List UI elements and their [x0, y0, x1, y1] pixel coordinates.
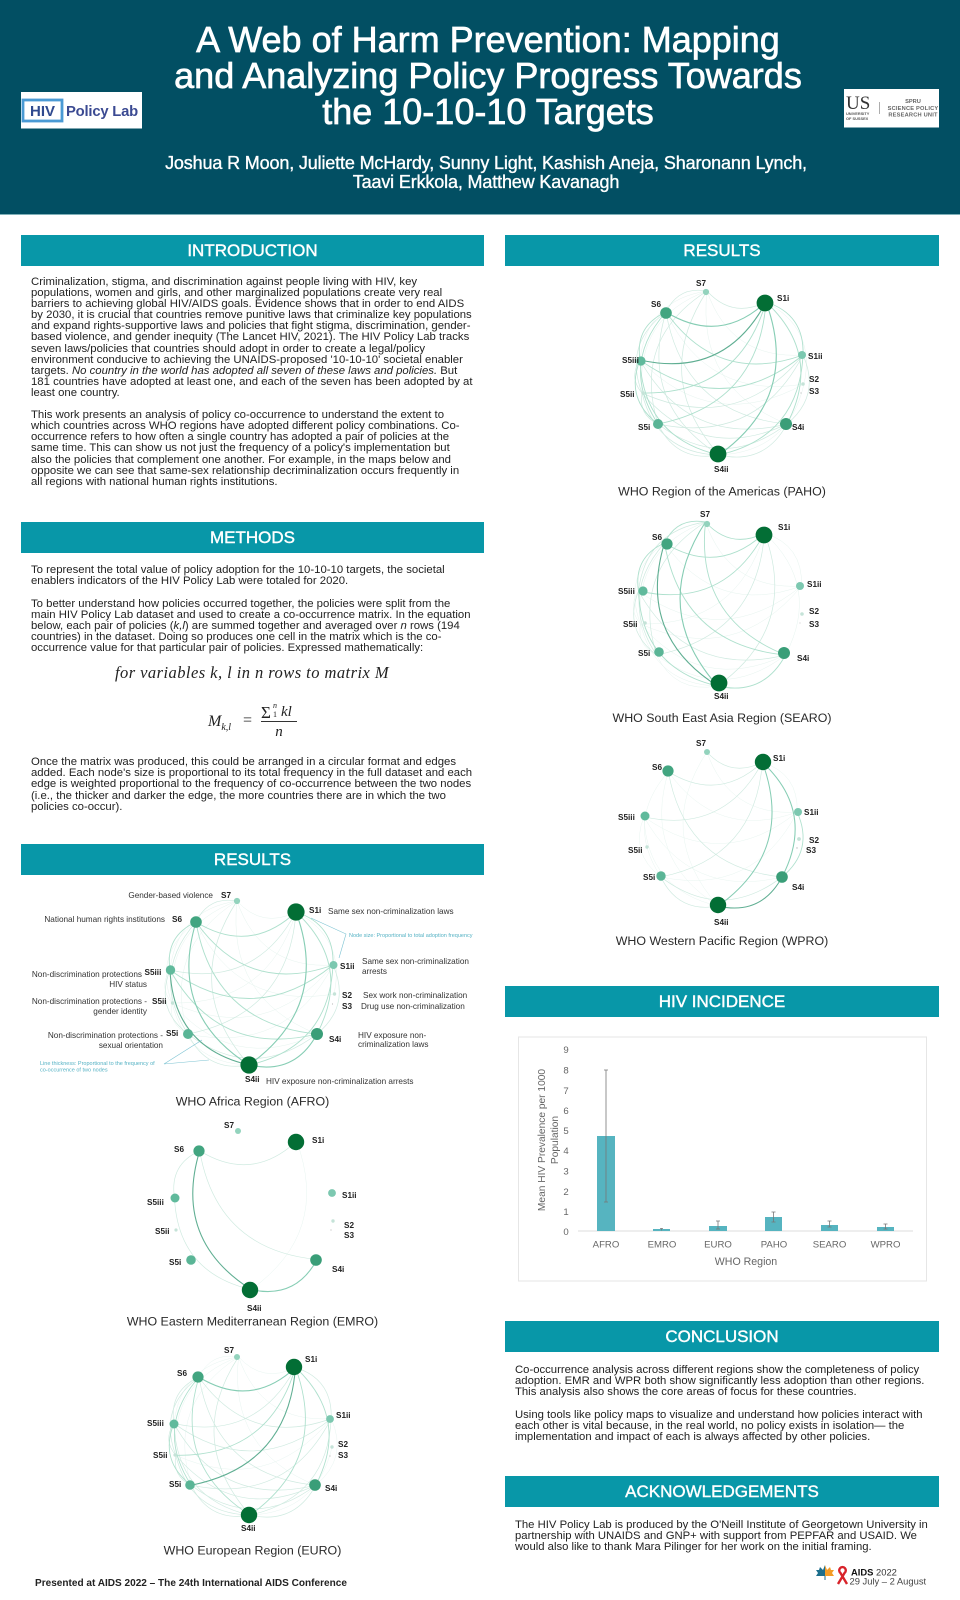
node codes: SEARO: S1i [778, 523, 790, 532]
policy descriptions: AFRO [32, 891, 469, 1086]
heading: results right: RESULTS [683, 241, 761, 260]
text block: methods intro: enablers indicators of the HIV Policy Lab were totaled for 2020. [31, 575, 348, 587]
node codes: AFRO: S5iii [144, 968, 161, 977]
y axis labels: 5 [563, 1126, 569, 1137]
node codes: WPRO: S4ii [714, 918, 729, 927]
equation: M formula: n [273, 701, 277, 710]
caption: EMRO: WHO Eastern Mediterranean Region (EMRO) [127, 1314, 378, 1328]
node codes: EURO: S4ii [241, 1524, 256, 1533]
equation: M formula: Mk,l [208, 713, 231, 733]
node codes: EMRO: S4i [332, 1265, 344, 1274]
node codes: EMRO: S6 [174, 1145, 184, 1154]
caption: EURO: WHO European Region (EURO) [164, 1544, 341, 1558]
node codes: PAHO: S4i [792, 423, 804, 432]
node codes: WPRO: S5i [643, 873, 655, 882]
edges: EURO [169, 1356, 337, 1517]
y axis labels: 6 [563, 1106, 569, 1117]
text block: methods intro: To represent the total value of policy adoption for the 10-10-10 targets, the societal [31, 564, 445, 576]
heading: methods: METHODS [210, 528, 295, 547]
equation: matrix sentence: for variables k, l in n rows to matrix M [115, 663, 389, 682]
text block: introduction: based violence, and gender inequity (The Lancet HIV, 2021). The HIV Policy Lab tracks [31, 331, 469, 343]
text block: conclusion [515, 1364, 924, 1443]
caption: PAHO: WHO Region of the Americas (PAHO) [618, 484, 826, 498]
caption: AFRO: WHO Africa Region (AFRO) [176, 1094, 329, 1108]
text block: methods intro: To better understand how policies occurred together, the policies were split from the [31, 598, 450, 610]
node codes: EURO: S5iii [147, 1419, 164, 1428]
text block: introduction: barriers to achieving global HIV/AIDS goals. Evidence shows that in order to end AIDS [31, 298, 464, 310]
node codes: PAHO: S2 [809, 375, 819, 384]
chart: EURO network [147, 1346, 351, 1558]
policy descriptions: AFRO: Drug use non-criminalization [361, 1002, 465, 1011]
node codes: SEARO: S5i [638, 649, 650, 658]
heading: introduction: INTRODUCTION [187, 241, 318, 260]
header banner [0, 0, 960, 215]
text block: introduction [31, 276, 472, 488]
node codes: EMRO: S5i [169, 1258, 181, 1267]
node codes: EMRO: S5ii [155, 1227, 170, 1236]
text block: acknowledgements: would also like to thank Mara Pilinger for her work on the initial framing. [515, 1541, 872, 1553]
title: A Web of Harm Prevention: Mapping [196, 19, 780, 60]
text block: methods description: edge is weighted proportional to the frequency of co-occurrence between the two nodes [31, 778, 471, 790]
text block: introduction: seven laws/policies that countries should adopt in order to create a legal/policy [31, 343, 425, 355]
node codes: PAHO: S5ii [620, 390, 635, 399]
node codes: PAHO: S6 [651, 300, 661, 309]
logo: HIV Policy Lab: HIV [30, 103, 55, 120]
policy descriptions: AFRO: Sex work non-criminalization [363, 991, 468, 1000]
category labels [593, 1240, 900, 1250]
node codes: WPRO: S5ii [628, 846, 643, 855]
chart: PAHO network [618, 279, 826, 498]
y axis labels: 0 [563, 1227, 569, 1238]
node codes: WPRO: S2 [809, 836, 819, 845]
equation: M formula: 1 [273, 710, 277, 719]
policy descriptions: AFRO: Same sex non-criminalization laws [328, 907, 454, 916]
text block: introduction: and expand rights-supportive laws and policies that fight stigma, discrimination, gender- [31, 320, 470, 332]
equation: M formula [208, 701, 297, 740]
text block: introduction: Criminalization, stigma, and discrimination against people living with HIV, key [31, 276, 417, 288]
node codes: PAHO [620, 279, 823, 474]
annotation: line thickness: Line thickness: Proportional to the frequency of [40, 1061, 155, 1067]
chart: AFRO network [32, 891, 473, 1108]
y axis labels: 4 [563, 1146, 569, 1157]
node codes: SEARO: S5ii [623, 620, 638, 629]
caption: SEARO: WHO South East Asia Region (SEARO) [613, 711, 831, 725]
title [174, 19, 802, 132]
title: and Analyzing Policy Progress Towards [174, 55, 802, 96]
policy descriptions: AFRO: sexual orientation [99, 1041, 163, 1050]
authors [165, 153, 807, 192]
text block: methods intro: occurrence value for that particular pair of policies. Expressed mathematically: [31, 642, 423, 654]
text block: introduction: which countries across WHO regions have adopted different policy combinations. Co- [31, 420, 460, 432]
node codes: EMRO: S4ii [247, 1304, 262, 1313]
text block: conclusion: This analysis also shows the core areas of focus for these countries. [515, 1386, 857, 1398]
node codes: EMRO: S1ii [342, 1191, 357, 1200]
nodes: EURO [170, 1354, 334, 1523]
authors: Joshua R Moon, Juliette McHardy, Sunny Light, Kashish Aneja, Sharonann Lynch, [165, 153, 807, 173]
text block: introduction: by 2030, it is crucial that countries remove punitive laws that criminalize key populations [31, 309, 472, 321]
logo: HIV Policy Lab [21, 92, 142, 128]
text block: methods intro: main HIV Policy Lab dataset and used to create a co-occurrence matrix. In the equation [31, 609, 470, 621]
y axis labels: 9 [563, 1045, 569, 1056]
heading: acknowledgements: ACKNOWLEDGEMENTS [625, 1482, 819, 1501]
node codes: WPRO: S1i [773, 754, 785, 763]
text block: methods intro: countries) in the dataset. Doing so produces one cell in the matrix which is the co- [31, 631, 441, 643]
y axis labels [563, 1045, 569, 1238]
text block: methods description: policies co-occur). [31, 801, 122, 813]
text block: conclusion: each other is vital because, in the real world, no policy exists in isolation— the [515, 1420, 904, 1432]
nodes: SEARO [638, 521, 804, 691]
node codes: AFRO: S1i [309, 906, 321, 915]
text block: conclusion: adoption. EMR and WPR both show significantly less adoption than other regions. [515, 1375, 924, 1387]
category labels: EURO [704, 1240, 732, 1250]
y axis labels: 3 [563, 1166, 569, 1178]
node codes: EURO: S1ii [336, 1411, 351, 1420]
title: the 10-10-10 Targets [322, 91, 654, 132]
node codes: PAHO: S4ii [714, 465, 729, 474]
node codes: AFRO: S7 [221, 891, 231, 900]
text block: introduction: also the policies that complement one another. For example, in the maps below and [31, 454, 451, 466]
node codes: PAHO: S1i [777, 294, 789, 303]
node codes: WPRO: S5iii [618, 813, 635, 822]
logo: University of Sussex SPRU: RESEARCH UNIT [888, 112, 938, 118]
node codes: WPRO: S7 [696, 739, 706, 748]
node codes: EURO: S6 [177, 1369, 187, 1378]
annotation: node size [311, 918, 473, 958]
policy descriptions: AFRO: arrests [362, 967, 387, 976]
policy descriptions: AFRO: National human rights institutions [44, 915, 165, 924]
text block: methods description: (i.e., the thicker and darker the edge, the more countries there are in which the two [31, 790, 446, 802]
node codes: WPRO: S1ii [804, 808, 819, 817]
logo: University of Sussex SPRU: SCIENCE POLICY [888, 106, 938, 112]
heading: conclusion [505, 1321, 939, 1352]
event dates: 29 July – 2 August [850, 1576, 927, 1586]
node codes: AFRO: S5ii [152, 997, 167, 1006]
node codes: WPRO: S3 [806, 846, 816, 855]
text block: acknowledgements [515, 1519, 928, 1553]
text block: introduction: targets. No country in the world has adopted all seven of these laws and policies. But [31, 365, 457, 377]
policy descriptions: AFRO: Non-discrimination protections - [48, 1031, 163, 1040]
text block: introduction: populations, women and girls, and other marginalized populations create very real [31, 287, 442, 299]
heading: HIV incidence [505, 986, 939, 1017]
node codes: AFRO: S2 [342, 991, 352, 1000]
node codes: PAHO: S5iii [622, 356, 639, 365]
bars [597, 1136, 894, 1231]
heading: results left [21, 844, 484, 875]
heading: HIV incidence: HIV INCIDENCE [659, 992, 785, 1011]
footer note: Presented at AIDS 2022 – The 24th International AIDS Conference [35, 1578, 347, 1589]
node codes: WPRO: S6 [652, 763, 662, 772]
node codes: WPRO [618, 739, 819, 927]
icon: red ribbon [838, 1567, 847, 1584]
node codes: AFRO: S4ii [245, 1075, 260, 1084]
node codes: SEARO: S1ii [807, 580, 822, 589]
node codes: EURO: S4i [325, 1484, 337, 1493]
node codes: EMRO: S3 [344, 1231, 354, 1240]
y axis title line 2: Population [550, 1116, 561, 1164]
category labels: PAHO [761, 1240, 787, 1250]
logo: University of Sussex SPRU: SPRU [905, 99, 921, 105]
heading: acknowledgements [505, 1476, 939, 1507]
node codes: SEARO: S4i [797, 654, 809, 663]
y axis labels: 1 [563, 1207, 569, 1218]
logo: University of Sussex SPRU [844, 89, 939, 128]
text block: methods intro: below, each pair of policies (k,l) are summed together and averaged over n rows (194 [31, 620, 460, 632]
node codes: PAHO: S7 [696, 279, 706, 288]
text block: introduction: environment conducive to achieving the UNAIDS-proposed '10-10-10' societal enabler [31, 354, 463, 366]
annotation: line thickness: co-occurrence of two nodes [40, 1068, 108, 1074]
text block: methods description: Once the matrix was produced, this could be arranged in a circular format and edges [31, 756, 456, 768]
heading: introduction [21, 235, 484, 266]
node codes: EURO: S3 [338, 1451, 348, 1460]
policy descriptions: AFRO: HIV exposure non-criminalization arrests [266, 1077, 413, 1086]
node codes: EURO: S5i [169, 1480, 181, 1489]
node codes: WPRO: S4i [792, 883, 804, 892]
text block: acknowledgements: The HIV Policy Lab is produced by the O'Neill Institute of Georgetown University in [515, 1519, 928, 1531]
edges: EMRO [174, 1141, 317, 1292]
policy descriptions: AFRO: Gender-based violence [128, 891, 213, 900]
node codes: EMRO: S5iii [147, 1198, 164, 1207]
heading: results right [505, 235, 939, 266]
heading: results left: RESULTS [214, 850, 291, 869]
node codes: AFRO [144, 891, 355, 1084]
edges: WPRO [639, 752, 803, 908]
node codes: SEARO: S6 [652, 533, 662, 542]
edges: PAHO [635, 290, 809, 457]
text block: methods description: added. Each node's size is proportional to its total frequency in the full dataset and each [31, 767, 472, 779]
category labels: AFRO [593, 1240, 619, 1250]
text block: introduction: opposite we can see that same-sex relationship decriminalization occurs frequently in [31, 465, 459, 477]
x axis line [578, 1230, 913, 1232]
node codes: AFRO: S1ii [340, 962, 355, 971]
text block: introduction: same time. This can show us not just the frequency of a policy's implementation but [31, 442, 450, 454]
node codes: PAHO: S3 [809, 387, 819, 396]
category labels: WPRO [871, 1240, 900, 1250]
category labels: EMRO [648, 1240, 676, 1250]
edges: SEARO [633, 521, 802, 688]
logo: HIV Policy Lab: Policy Lab [66, 104, 138, 120]
text block: conclusion: implementation and impact of each is always affected by other policies. [515, 1431, 870, 1443]
node codes: SEARO [618, 510, 822, 701]
policy descriptions: AFRO: Same sex non-criminalization [362, 957, 469, 966]
y axis labels: 2 [563, 1187, 569, 1198]
annotation: node size: Node size: Proportional to total adoption frequency [349, 933, 473, 939]
category labels: SEARO [813, 1240, 846, 1250]
policy descriptions: AFRO: criminalization laws [358, 1040, 429, 1049]
node codes: AFRO: S6 [172, 915, 182, 924]
node codes: PAHO: S1ii [808, 352, 823, 361]
node codes: EMRO: S1i [312, 1136, 324, 1145]
text block: introduction: 181 countries have adopted at least one, and each of the seven has been adopted by at [31, 376, 472, 388]
text block: introduction: occurrence refers to how often a single country has adopted a pair of policies at the [31, 431, 449, 443]
annotation: line thickness [40, 1040, 209, 1074]
node codes: EMRO: S7 [224, 1121, 234, 1130]
node codes: SEARO: S2 [809, 607, 819, 616]
chart: EMRO network [127, 1121, 378, 1328]
nodes: EMRO [170, 1128, 336, 1298]
node codes: EURO: S7 [224, 1346, 234, 1355]
nodes: PAHO [636, 289, 806, 462]
nodes: WPRO [640, 749, 802, 913]
node codes: EURO: S5ii [153, 1451, 168, 1460]
text block: conclusion: Using tools like policy maps to visualize and understand how policies interact with [515, 1409, 923, 1421]
caption: WPRO: WHO Western Pacific Region (WPRO) [616, 934, 828, 948]
chart: WPRO network [616, 739, 828, 948]
text block: acknowledgements: partnership with UNAIDS and GNP+ with support from PEPFAR and USAID. We [515, 1530, 917, 1542]
node codes: AFRO: S4i [329, 1035, 341, 1044]
node codes: AFRO: S3 [342, 1002, 352, 1011]
x axis title: WHO Region [715, 1256, 777, 1268]
node codes: SEARO: S4ii [714, 692, 729, 701]
node codes: SEARO: S3 [809, 620, 819, 629]
authors: Taavi Erkkola, Matthew Kavanagh [353, 172, 619, 192]
equation: M formula: kl [281, 704, 292, 720]
edges: AFRO [165, 900, 339, 1067]
y axis labels: 8 [563, 1066, 569, 1076]
node codes: PAHO: S5i [638, 423, 650, 432]
node codes: EMRO: S2 [344, 1221, 354, 1230]
event text: AIDS 2022 [851, 1566, 897, 1578]
text block: methods description [31, 756, 472, 813]
node codes: AFRO: S5i [166, 1029, 178, 1038]
text block: introduction: This work presents an analysis of policy co-occurrence to understand the extent to [31, 409, 444, 421]
nodes: AFRO [166, 898, 338, 1074]
equation: M formula: n [275, 724, 283, 740]
y axis labels: 7 [563, 1086, 569, 1097]
heading: methods [21, 522, 484, 553]
heading: conclusion: CONCLUSION [665, 1327, 779, 1346]
logo: University of Sussex SPRU: US [846, 93, 870, 114]
y axis title: Mean HIV Prevalence per 1000 [537, 1069, 548, 1211]
logo: University of Sussex SPRU: OF SUSSEX [846, 116, 869, 121]
text block: methods intro [31, 564, 470, 654]
logo: AIDS 2022 [816, 1565, 927, 1586]
node codes: EURO: S1i [305, 1355, 317, 1364]
logo: University of Sussex SPRU: UNIVERSITY [846, 111, 870, 116]
bar chart: HIV prevalence by WHO region [518, 1037, 926, 1281]
text block: conclusion: Co-occurrence analysis across different regions show the completeness of policy [515, 1364, 919, 1376]
policy descriptions: AFRO: gender identity [93, 1007, 148, 1016]
equation: M formula: Σ [261, 703, 271, 722]
chart: SEARO network [613, 510, 831, 725]
policy descriptions: AFRO: HIV exposure non- [358, 1031, 427, 1040]
text block: introduction: all regions with national human rights institutions. [31, 476, 278, 488]
policy descriptions: AFRO: HIV status [109, 980, 147, 989]
text block: introduction: least one country. [31, 387, 120, 399]
node codes: EMRO [147, 1121, 357, 1313]
policy descriptions: AFRO: Non-discrimination protections [32, 970, 142, 979]
policy descriptions: AFRO: Non-discrimination protections - [32, 997, 147, 1006]
node codes: EURO [147, 1346, 351, 1533]
node codes: SEARO: S7 [700, 510, 710, 519]
error bars [604, 1070, 888, 1230]
equation: M formula: = [243, 712, 252, 729]
node codes: SEARO: S5iii [618, 587, 635, 596]
node codes: EURO: S2 [338, 1440, 348, 1449]
icon: maple leaf [816, 1565, 834, 1580]
